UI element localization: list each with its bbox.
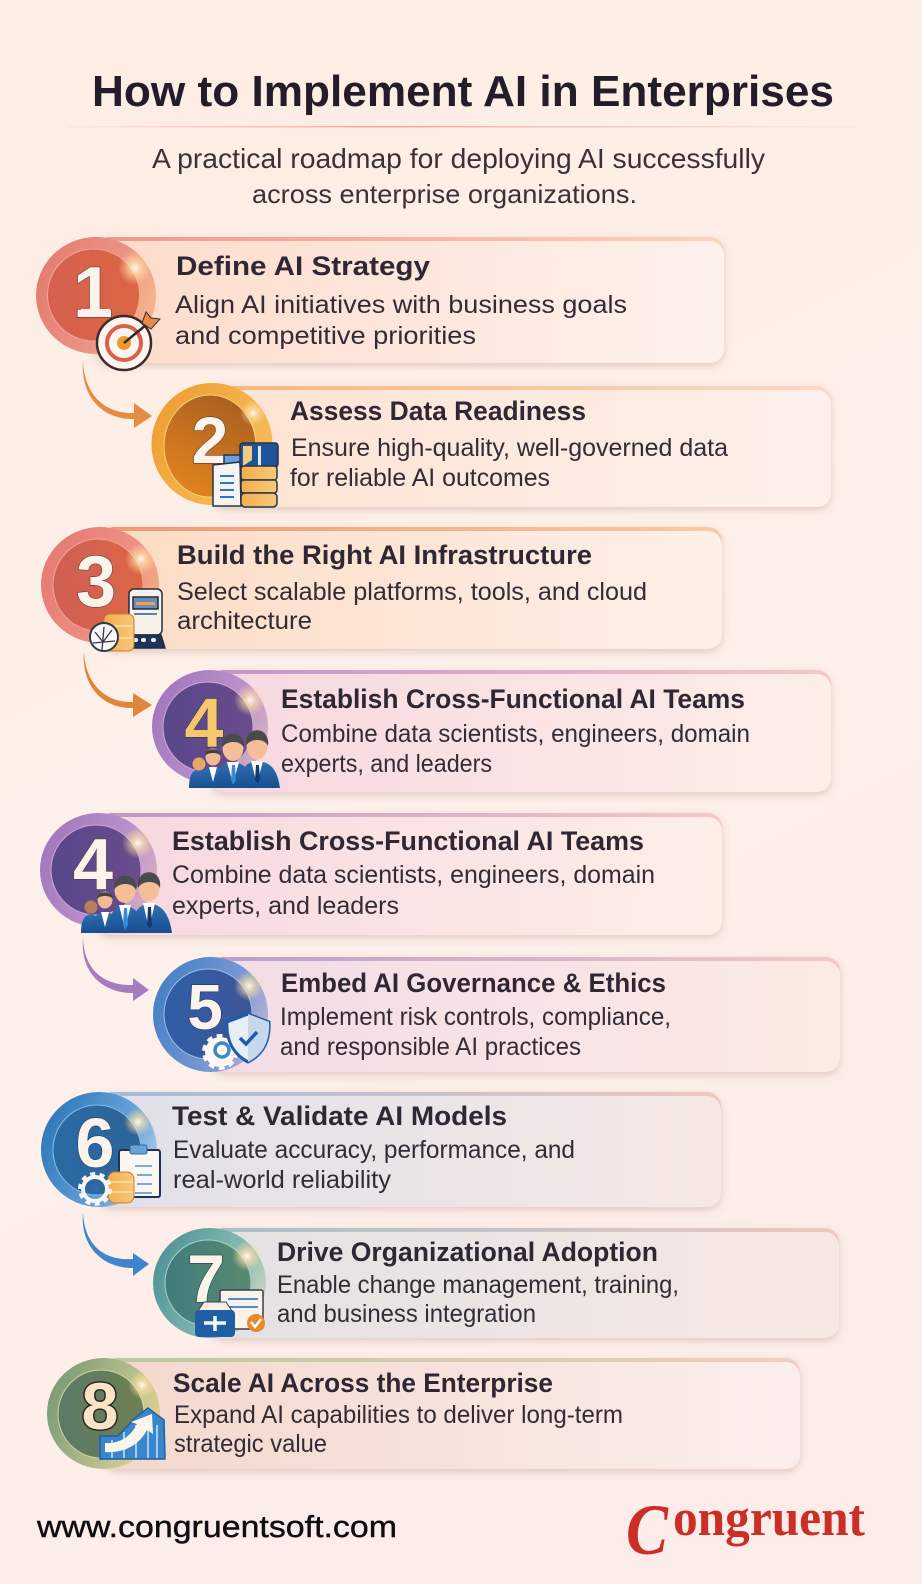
step 3 [41, 527, 722, 651]
card 6 [99, 1092, 721, 1207]
icon: target [97, 312, 160, 370]
card 3 [100, 527, 722, 649]
text 3: Select scalable platforms, tools, and cloud [177, 578, 647, 606]
icon: clipboard, database and gear [80, 1145, 160, 1204]
badge 4 [152, 670, 268, 783]
text 4: Combine data scientists, engineers, domain [281, 720, 750, 748]
text 4 repeat [172, 826, 655, 920]
text 4 repeat: experts, and leaders [172, 892, 399, 920]
subtitle: A practical roadmap for deploying AI successfully [152, 143, 765, 174]
icon: team of people repeat [81, 872, 172, 933]
logo: Congruent: ongruent [673, 1490, 866, 1547]
arrow: step 3 to 4 [84, 651, 152, 717]
icon: gear and shield [205, 1014, 269, 1067]
text 3 [177, 540, 647, 635]
arrow: step 6 to 7 [83, 1212, 149, 1276]
step 1 [36, 237, 724, 370]
badge 7: 7 [187, 1241, 225, 1317]
badge 2: 2 [192, 403, 228, 477]
text 4 repeat: Establish Cross-Functional AI Teams [172, 826, 644, 856]
text 6: Test & Validate AI Models [172, 1101, 507, 1131]
icon: infrastructure server, database and globe [90, 589, 165, 651]
text 4 repeat: Combine data scientists, engineers, domain [172, 861, 655, 889]
text 7: and business integration [277, 1300, 536, 1328]
text 1 [175, 251, 627, 350]
text 4: Establish Cross-Functional AI Teams [281, 684, 745, 714]
text 3: Build the Right AI Infrastructure [177, 540, 592, 570]
card 4 [210, 670, 831, 792]
badge 2 [152, 383, 272, 505]
text 5: Implement risk controls, compliance, [280, 1003, 671, 1031]
subtitle: across enterprise organizations. [252, 179, 637, 209]
text 2: Assess Data Readiness [290, 396, 586, 426]
step 4 second instance [40, 813, 722, 935]
text 2 [290, 396, 728, 492]
badge 8 [47, 1358, 160, 1469]
text 7: Enable change management, training, [277, 1271, 679, 1299]
badge 5 [153, 957, 268, 1072]
subtitle [152, 143, 765, 209]
card 1 [96, 237, 724, 363]
badge 4 repeat: 4 [73, 825, 113, 905]
step 2 [152, 383, 831, 507]
step 5 [153, 957, 840, 1072]
badge 4 repeat [40, 813, 157, 927]
arrow: step 4 to 5 [83, 938, 149, 1001]
text 3: architecture [177, 607, 312, 635]
text 1: and competitive priorities [175, 322, 476, 350]
badge 6: 6 [76, 1104, 114, 1182]
icon: change management kit and checklist [195, 1290, 265, 1337]
title: How to Implement AI in Enterprises [92, 67, 834, 116]
badge 4: 4 [185, 684, 224, 762]
text 7: Drive Organizational Adoption [277, 1237, 658, 1267]
text 6: Evaluate accuracy, performance, and [173, 1136, 575, 1164]
text 8: Expand AI capabilities to deliver long-term [174, 1401, 623, 1429]
card 7 [210, 1228, 839, 1338]
icon: growth chart [100, 1408, 165, 1459]
badge 5: 5 [187, 971, 223, 1043]
card 4 repeat [98, 813, 722, 935]
text 8: Scale AI Across the Enterprise [173, 1368, 553, 1398]
badge 3 [41, 527, 159, 643]
badge 1: 1 [73, 253, 113, 333]
text 5: Embed AI Governance & Ethics [281, 968, 666, 998]
card 8 [103, 1358, 800, 1469]
text 6: real-world reliability [173, 1166, 392, 1194]
arrow: step 1 to 2 [83, 360, 152, 428]
text 1: Define AI Strategy [176, 251, 430, 281]
step 8 [47, 1358, 800, 1469]
step 7 [153, 1228, 839, 1338]
icon: data documents and database [213, 443, 278, 507]
text 7 [277, 1237, 679, 1328]
card 5 [210, 957, 840, 1072]
badge 8: 8 [82, 1369, 118, 1443]
logo: Congruent: C [626, 1490, 669, 1570]
text 4 [281, 684, 750, 778]
text 2: for reliable AI outcomes [290, 464, 550, 492]
footer website: www.congruentsoft.com [36, 1509, 397, 1544]
text 1: Align AI initiatives with business goals [175, 291, 627, 319]
text 2: Ensure high-quality, well-governed data [291, 434, 728, 462]
step 4 first instance [152, 670, 831, 792]
text 5: and responsible AI practices [280, 1033, 581, 1061]
text 5 [280, 968, 671, 1061]
badge 6 [41, 1092, 157, 1207]
text 8 [173, 1368, 623, 1458]
badge 7 [153, 1228, 266, 1338]
icon: team of people [189, 730, 280, 788]
badge 1 [36, 237, 156, 354]
text 8: strategic value [174, 1430, 327, 1458]
badge 3: 3 [76, 542, 116, 622]
step 6 [41, 1092, 721, 1207]
text 4: experts, and leaders [281, 750, 492, 778]
text 6 [172, 1101, 575, 1194]
logo: Congruent [626, 1490, 866, 1570]
card 2 [212, 386, 831, 507]
